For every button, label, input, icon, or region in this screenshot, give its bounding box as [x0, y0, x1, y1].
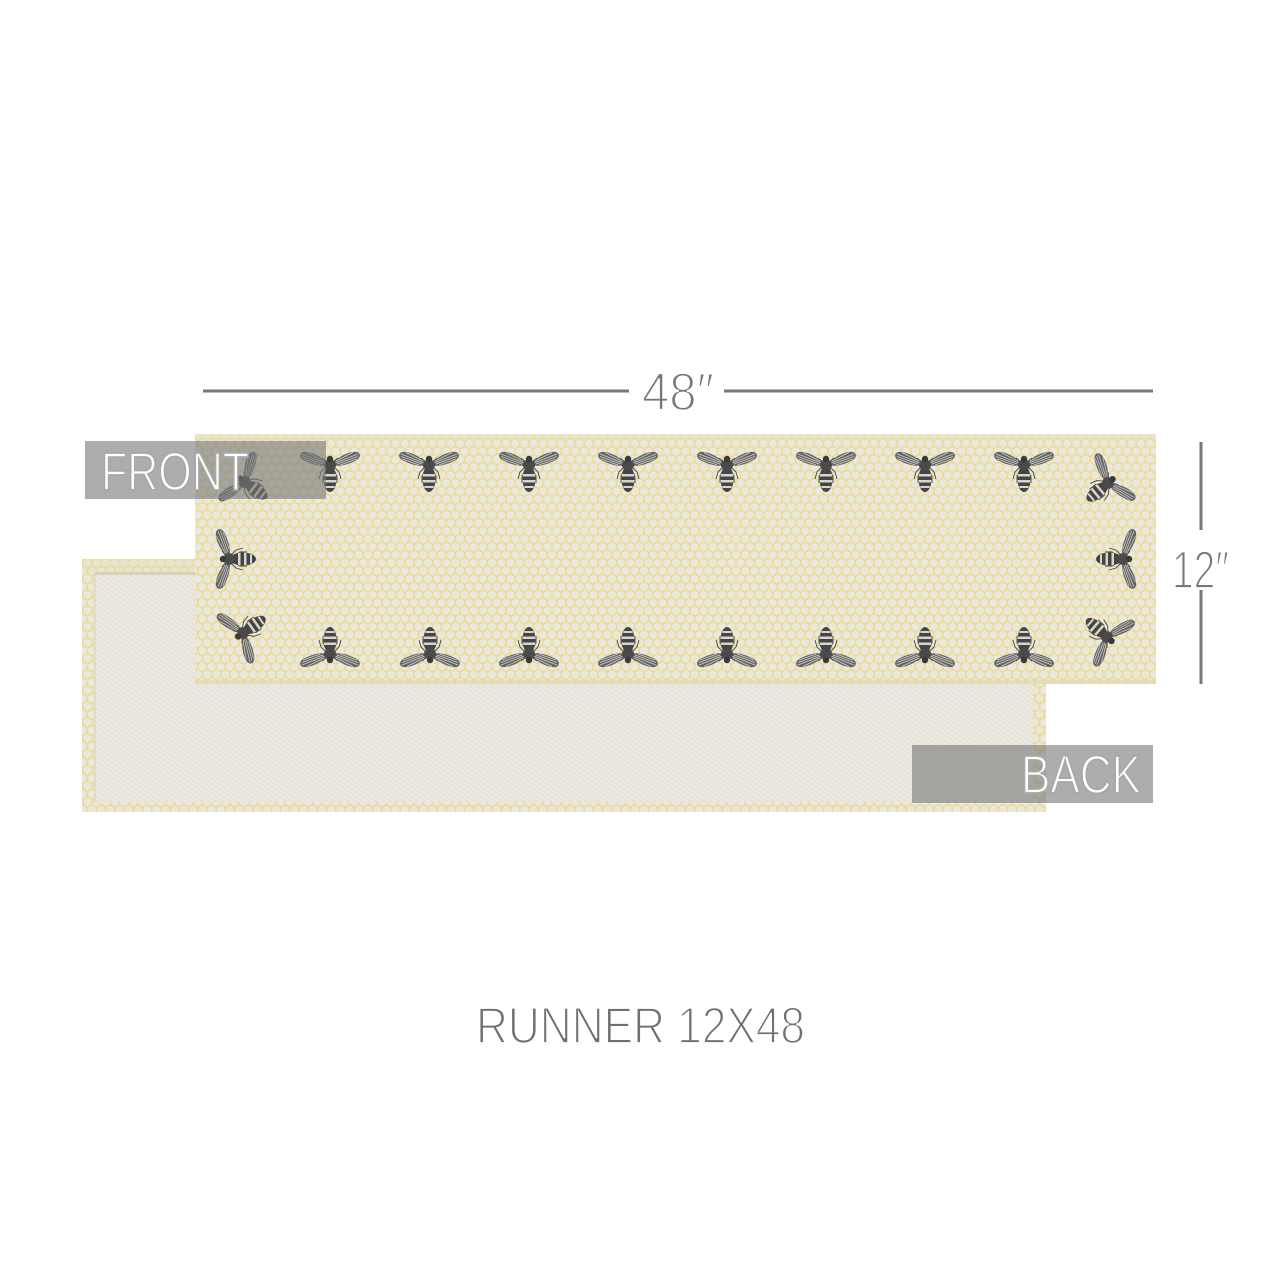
back inner woven panel [95, 575, 1033, 802]
icon: bee bottom row 7 [895, 627, 955, 667]
icon: bee top right corner [1068, 452, 1137, 523]
label: BACK: BACK [1021, 745, 1141, 805]
icon: bee bottom left corner [215, 593, 282, 665]
dimension: width 48 inches [203, 363, 1153, 422]
panel: back of runner [82, 559, 1046, 812]
icon: bee top left corner [217, 450, 284, 522]
icon: bee top row 7 [895, 452, 955, 492]
icon: bee top row 4 [598, 452, 658, 492]
icon: bee bottom row 3 [499, 627, 559, 667]
icon: bee left middle [216, 529, 256, 589]
icon: bee top row 1 [300, 452, 360, 492]
icon: bee top row 6 [796, 452, 856, 492]
icon: bee right middle [1096, 529, 1136, 589]
dimension: height 12 inches: 12″ [1172, 541, 1229, 600]
icon: bee top row 3 [499, 452, 559, 492]
icon: bee bottom right corner [1067, 597, 1137, 668]
icon: bee bottom row 4 [598, 627, 658, 667]
icon: bee bottom row 8 [994, 627, 1054, 667]
icon: bee bottom row 2 [400, 627, 460, 667]
caption: product size: RUNNER 12X48 [476, 997, 805, 1054]
icon: bee top row 8 [994, 452, 1054, 492]
panel: front of runner [195, 434, 1156, 684]
label: FRONT: FRONT [101, 442, 249, 502]
dimension: height 12 inches [1172, 442, 1229, 684]
icon: bee top row 5 [697, 452, 757, 492]
icon: bee bottom row 5 [697, 627, 757, 667]
dimension: width 48 inches: 48″ [642, 363, 714, 422]
icon: bee bottom row 6 [796, 627, 856, 667]
icon: bee bottom row 1 [300, 627, 360, 667]
label: BACK [912, 745, 1153, 805]
icon: bee top row 2 [399, 452, 459, 492]
